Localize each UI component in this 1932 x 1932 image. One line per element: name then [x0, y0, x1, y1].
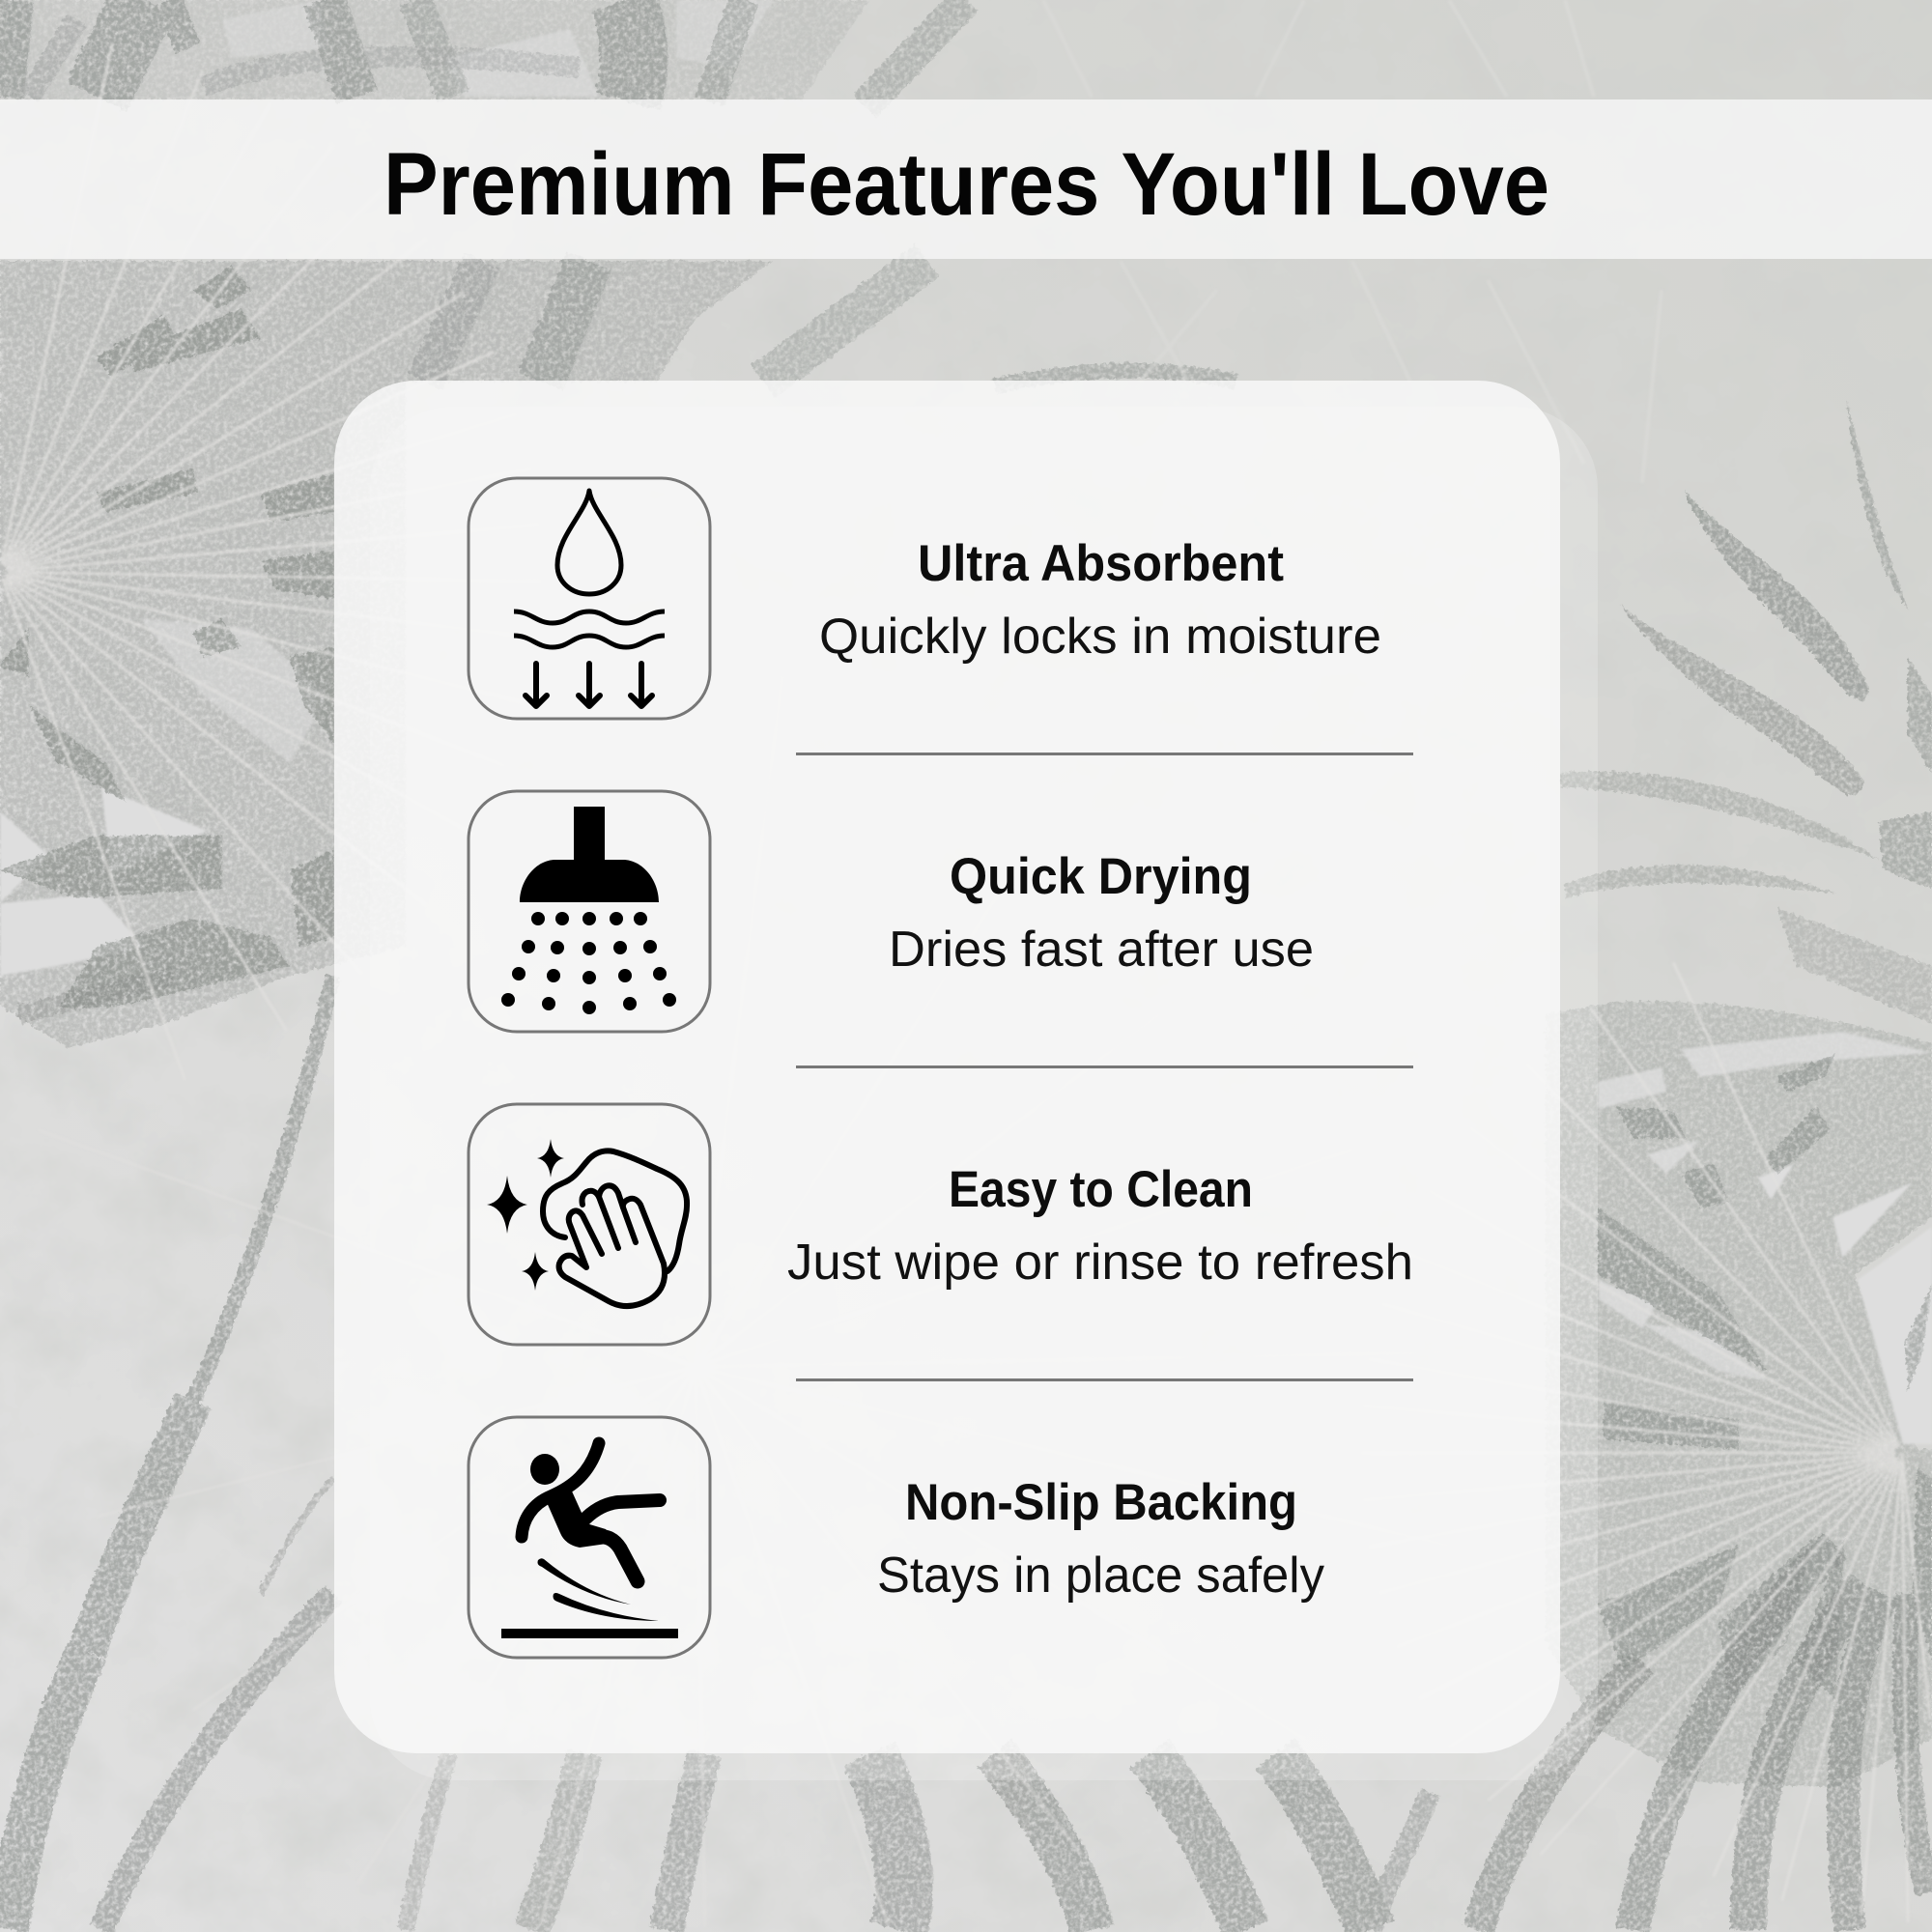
heading: Ultra Absorbent: [918, 535, 1284, 592]
right fan dark patches: [1598, 1053, 1932, 1700]
description: Quickly locks in moisture: [819, 609, 1381, 665]
description: Stays in place safely: [877, 1548, 1324, 1604]
title: Premium Features You'll Love: [384, 135, 1549, 234]
bottom-left long strips: [8, 976, 904, 1930]
left fan dark patches: [0, 266, 334, 1009]
description: Dries fast after use: [889, 922, 1314, 978]
icon: person slipping: [469, 1417, 710, 1658]
title banner: [0, 99, 1932, 259]
feature: Non-Slip Backing: [469, 1417, 1324, 1658]
panel: offset back card: [370, 407, 1598, 1780]
feature: Ultra Absorbent: [469, 478, 1381, 719]
feature: Quick Drying: [469, 791, 1314, 1032]
icon: shower head: [469, 791, 710, 1032]
heading: Easy to Clean: [949, 1161, 1253, 1218]
panel: front card: [334, 381, 1560, 1753]
description: Just wipe or rinse to refresh: [787, 1235, 1413, 1291]
feature: Easy to Clean: [469, 1104, 1413, 1345]
right fan lower curved strips: [1633, 1546, 1927, 1930]
upper right leaves: [1560, 401, 1932, 1024]
heading: Quick Drying: [950, 848, 1252, 905]
bottom middle strips: [995, 1662, 1642, 1930]
pale gaps between fronds: [0, 0, 1932, 1444]
top strips: [0, 0, 1236, 386]
icon: hand wiping with sparkles: [469, 1104, 710, 1345]
heading: Non-Slip Backing: [905, 1474, 1297, 1531]
icon: water absorbing: [469, 478, 710, 719]
